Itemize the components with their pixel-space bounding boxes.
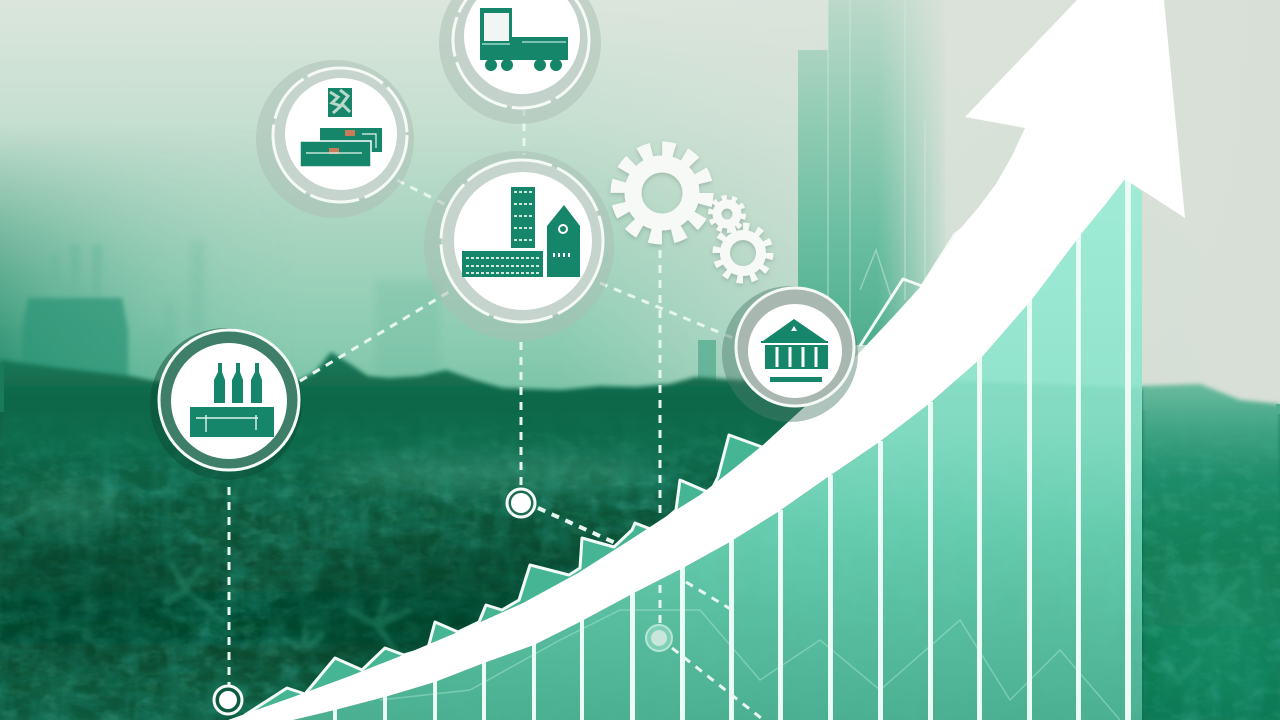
- node: containers: [256, 60, 414, 218]
- icon: gears: [619, 150, 769, 279]
- background: misty sky: [0, 0, 1280, 430]
- node: factory bottles: [150, 328, 302, 480]
- node: truck: [439, 0, 601, 124]
- node: bank: [722, 286, 858, 422]
- small line chart above arrow: [245, 225, 968, 715]
- node: industrial buildings: [424, 151, 614, 341]
- dashed connector lines: [229, 108, 761, 718]
- growth arrow: [228, 0, 1185, 720]
- node marker: first dot: [214, 686, 242, 714]
- icon: buildings: [462, 187, 580, 277]
- icon: truck: [480, 8, 568, 71]
- icon: bottles on factory: [190, 363, 274, 437]
- node marker: second dot: [507, 489, 535, 517]
- palm fronds: [165, 565, 1250, 680]
- background: forest: [0, 352, 1280, 720]
- icon: bank: [761, 319, 828, 382]
- background: city skyline: [22, 0, 945, 410]
- bar chart: [293, 179, 1142, 720]
- node marker: third dot: [646, 625, 672, 651]
- icon: stacked containers: [300, 88, 382, 167]
